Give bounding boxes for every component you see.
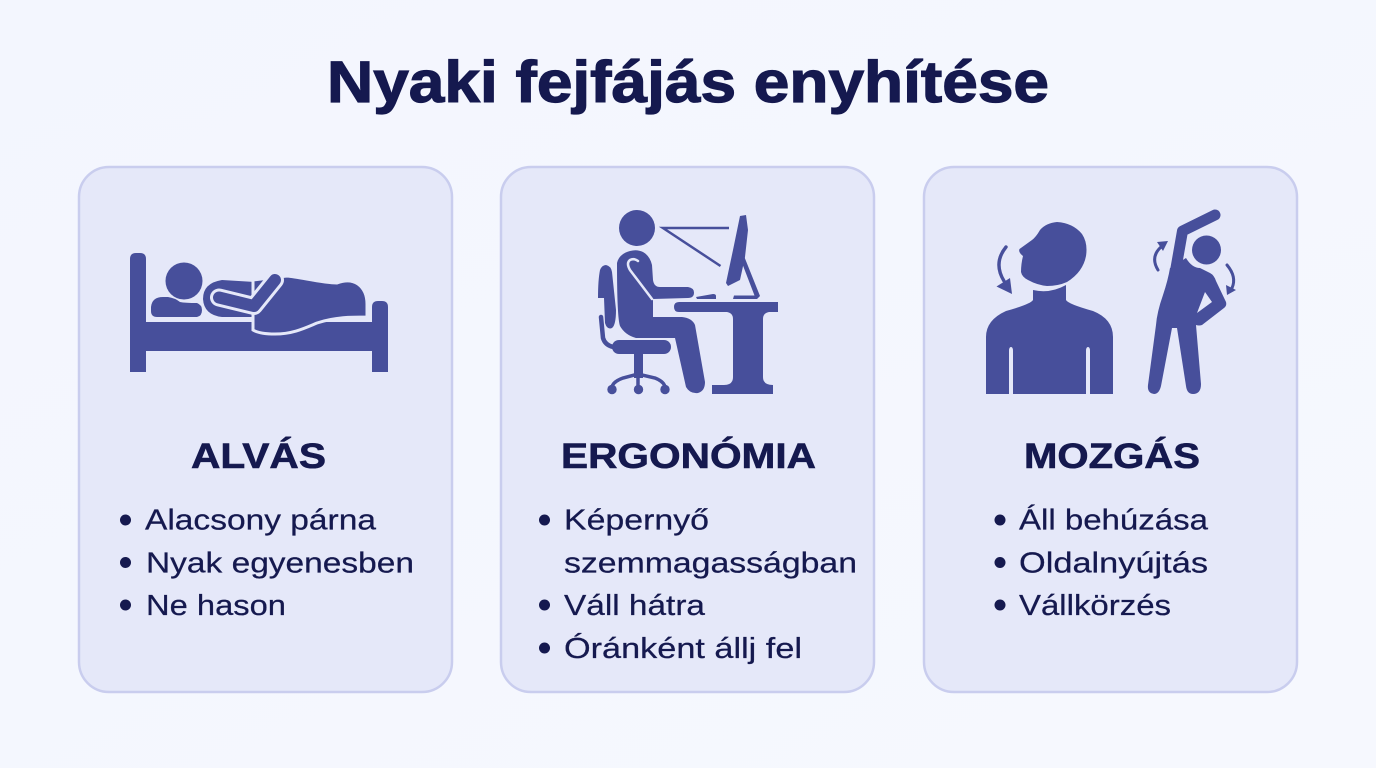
icon: person sleeping in bed: [130, 253, 388, 372]
bullet list: mozgás: Oldalnyújtás: [1019, 548, 1208, 580]
bullet list: alvás: Alacsony párna: [145, 504, 377, 536]
bullet list: alvás: Nyak egyenesben: [146, 548, 414, 580]
bullet list: mozgás: Vállkörzés: [1019, 590, 1171, 622]
bullet list: alvás: Ne hason: [146, 590, 286, 622]
heading: ergonómia: ERGONÓMIA: [561, 436, 816, 476]
bullet list: mozgás: [994, 504, 1209, 622]
panel: ergonómia: [501, 167, 874, 692]
icon: side stretch exercise: [1148, 215, 1236, 394]
heading: alvás: ALVÁS: [191, 436, 326, 476]
bullet list: ergonómia: Óránként állj fel: [564, 632, 802, 665]
bullet list: ergonómia: [539, 504, 857, 665]
bullet list: alvás: [120, 504, 414, 622]
panel: alvás: [79, 167, 452, 692]
panel: mozgás: [924, 167, 1297, 692]
heading: mozgás: MOZGÁS: [1024, 436, 1200, 476]
bullet list: mozgás: Áll behúzása: [1019, 504, 1209, 536]
icon: person at ergonomic desk: [598, 210, 778, 394]
bullet list: ergonómia: szemmagasságban: [564, 548, 857, 580]
bullet list: ergonómia: Váll hátra: [564, 590, 706, 622]
title: Nyaki fejfájás enyhítése: [327, 50, 1049, 115]
icon: chin tuck exercise: [986, 222, 1113, 394]
bullet list: ergonómia: Képernyő: [564, 504, 709, 536]
